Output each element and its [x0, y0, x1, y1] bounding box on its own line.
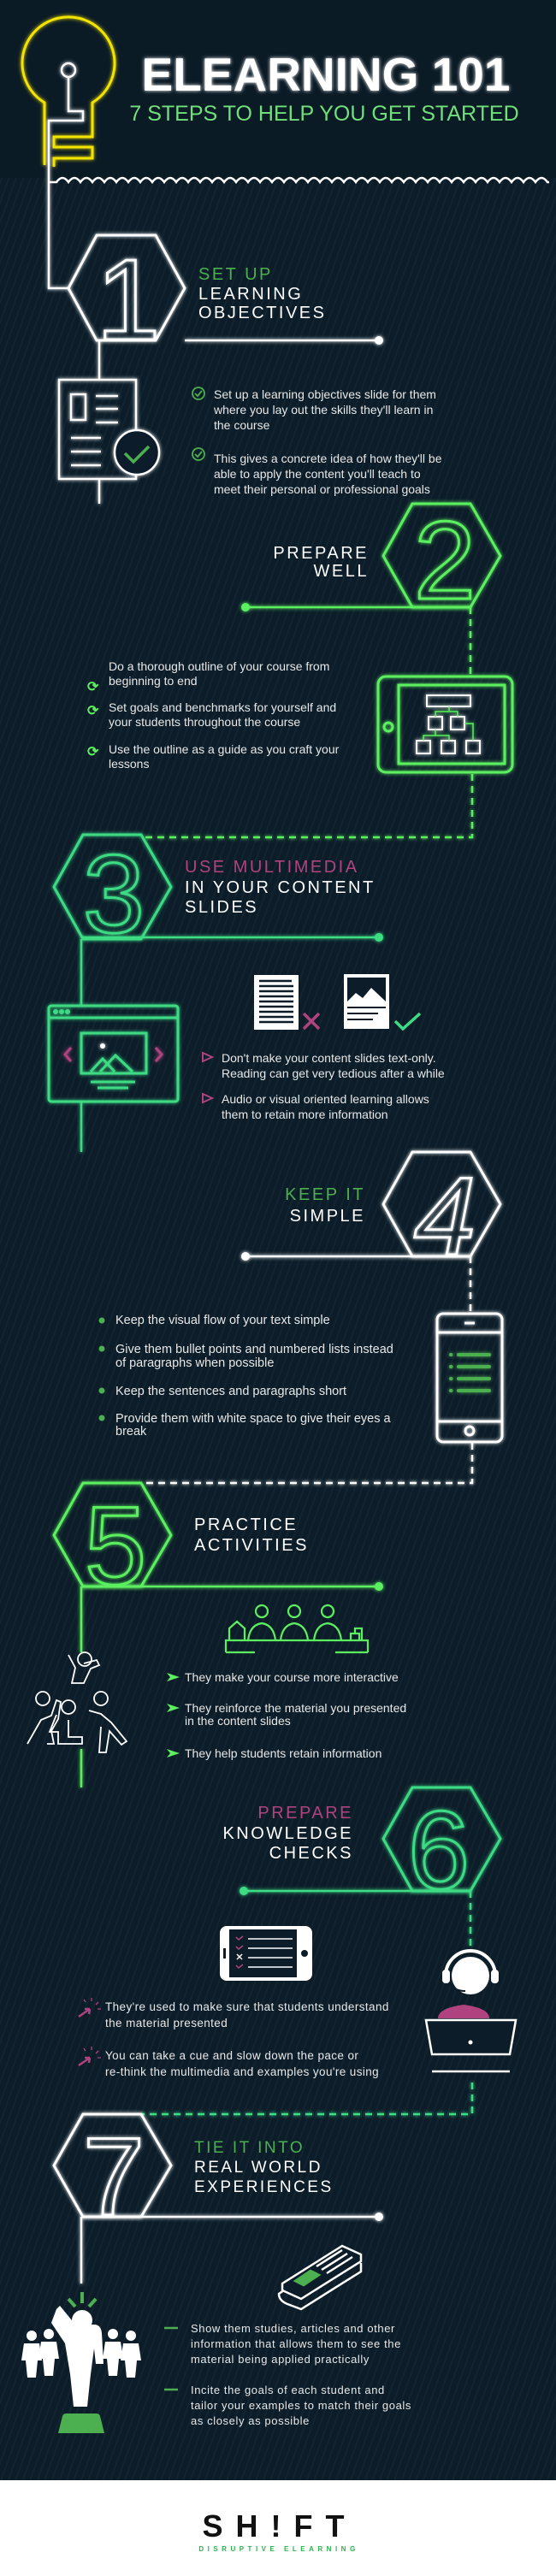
- icon: light bulb: [22, 17, 115, 288]
- step 5 bullets: [167, 1670, 406, 1760]
- step 3 heading: USE MULTIMEDIA: [185, 858, 359, 877]
- step 6 bullets: You can take a cue and slow down the pace or: [105, 2049, 358, 2062]
- icon: group at table: [226, 1605, 368, 1652]
- step 2 bullets: Do a thorough outline of your course from: [109, 659, 329, 673]
- title: ELEARNING 101: [142, 48, 510, 101]
- step 4 bullets: Keep the visual flow of your text simple: [115, 1314, 330, 1327]
- step 1 bullets: [192, 387, 442, 496]
- step 6 bullets: [79, 1998, 389, 2078]
- step 5 hexagon: [54, 1483, 171, 1608]
- step 3 bullets: [203, 1051, 445, 1121]
- step 7 heading: TIE IT INTO: [194, 2139, 305, 2157]
- step 1 heading: LEARNING: [198, 285, 303, 304]
- step 3 hexagon: 3: [83, 831, 145, 956]
- step 6 bullets: the material presented: [105, 2017, 228, 2029]
- step 5 heading: ACTIVITIES: [194, 1536, 309, 1555]
- step 1 hexagon: [68, 235, 185, 364]
- step 1 bullets: the course: [214, 418, 270, 432]
- step 5 heading: PRACTICE: [194, 1515, 298, 1534]
- footer: [0, 2480, 556, 2576]
- step 3 bullets: Don't make your content slides text-only.: [222, 1051, 436, 1065]
- step 6 bullets: re-think the multimedia and examples you're using: [105, 2065, 379, 2078]
- subtitle: 7 STEPS TO HELP YOU GET STARTED: [129, 102, 519, 126]
- icon: people pyramid: [27, 1652, 127, 1752]
- icon: phone with checklist: [220, 1926, 312, 1981]
- step 4 bullets: [99, 1314, 393, 1439]
- step 2 heading: [273, 544, 369, 581]
- step 5 bullets: They make your course more interactive: [185, 1670, 399, 1684]
- step 7 hexagon: 7: [83, 2114, 145, 2239]
- icon: text vs image docs: [254, 974, 420, 1030]
- step 3 hexagon: [54, 831, 171, 956]
- step 6 bullets: They're used to make sure that students understand: [105, 2000, 389, 2013]
- step 1 bullets: This gives a concrete idea of how they'll be: [214, 452, 442, 465]
- step 4 heading: KEEP IT: [285, 1185, 365, 1204]
- icon: support agent with laptop: [426, 1951, 516, 2071]
- step 1 hexagon: 1: [96, 235, 161, 364]
- step 6 hexagon: [383, 1787, 500, 1912]
- step 3 heading: [185, 858, 376, 917]
- step 2 bullets: Set goals and benchmarks for yourself and: [109, 700, 336, 714]
- step 5 bullets: in the content slides: [185, 1714, 291, 1728]
- step 4 hexagon: 4: [414, 1154, 476, 1279]
- step 7 bullets: material being applied practically: [191, 2353, 370, 2366]
- footer: SH!FT: [203, 2508, 357, 2544]
- step 2 bullets: Use the outline as a guide as you craft your: [109, 742, 340, 756]
- step 4 heading: SIMPLE: [290, 1207, 365, 1226]
- step 7 bullets: Show them studies, articles and other: [191, 2322, 395, 2335]
- step 4 heading: [285, 1185, 365, 1226]
- icon: tablet with chart: [378, 676, 512, 772]
- step 3 bullets: Audio or visual oriented learning allows: [222, 1092, 429, 1106]
- step 7 heading: EXPERIENCES: [194, 2178, 334, 2196]
- step 6 heading: PREPARE: [257, 1804, 353, 1823]
- step 2 bullets: [87, 659, 340, 771]
- step 6 hexagon: 6: [408, 1787, 470, 1912]
- step 5 bullets: They help students retain information: [185, 1746, 382, 1760]
- icon: smartphone: [437, 1314, 502, 1442]
- step 2 hexagon: [383, 498, 500, 623]
- step 2 bullets: beginning to end: [109, 674, 198, 688]
- step 7 bullets: tailor your examples to match their goals: [191, 2399, 411, 2412]
- step 1 bullets: meet their personal or professional goals: [214, 482, 430, 496]
- step 2 bullets: ⟳: [87, 704, 99, 718]
- step 2 heading: PREPARE: [273, 544, 369, 563]
- step 6 heading: KNOWLEDGE: [222, 1824, 353, 1843]
- step 2 bullets: your students throughout the course: [109, 715, 300, 729]
- icon: newspaper: [279, 2246, 361, 2309]
- step 3 heading: SLIDES: [185, 898, 258, 917]
- step 2 hexagon: 2: [414, 498, 476, 623]
- step 6 heading: [222, 1804, 353, 1863]
- step 7 bullets: information that allows them to see the: [191, 2337, 401, 2350]
- title: [129, 48, 519, 126]
- step 4 bullets: break: [115, 1425, 147, 1439]
- step 5 hexagon: 5: [85, 1483, 146, 1608]
- step 4 bullets: Give them bullet points and numbered lists instead: [115, 1343, 393, 1356]
- step 1 heading: SET UP: [198, 265, 273, 284]
- step 4 bullets: of paragraphs when possible: [115, 1356, 274, 1370]
- step 3 bullets: them to retain more information: [222, 1108, 388, 1121]
- step 6 heading: CHECKS: [269, 1844, 353, 1863]
- step 4 bullets: Keep the sentences and paragraphs short: [115, 1385, 346, 1398]
- step 3 bullets: Reading can get very tedious after a while: [222, 1066, 445, 1080]
- connectors: [81, 340, 472, 2284]
- step 7 bullets: Incite the goals of each student and: [191, 2384, 385, 2396]
- step 7 bullets: as closely as possible: [191, 2414, 310, 2427]
- step 4 bullets: Provide them with white space to give their eyes a: [115, 1412, 392, 1426]
- step 5 bullets: They reinforce the material you presented: [185, 1701, 406, 1715]
- step 4 hexagon: [383, 1152, 500, 1279]
- step 2 bullets: lessons: [109, 757, 149, 771]
- icon: browser slide: [49, 1006, 178, 1102]
- footer: DISRUPTIVE ELEARNING: [198, 2545, 359, 2553]
- step 7 hexagon: [54, 2114, 171, 2239]
- step 1 bullets: able to apply the content you'll teach to: [214, 467, 421, 481]
- step 1 heading: OBJECTIVES: [198, 304, 326, 322]
- step 7 heading: REAL WORLD: [194, 2159, 322, 2177]
- step 7 bullets: [164, 2322, 411, 2427]
- step 1 bullets: Set up a learning objectives slide for them: [214, 387, 436, 401]
- icon: leader with group: [21, 2292, 141, 2433]
- wavy divider: [49, 178, 549, 182]
- icon: objectives document: [59, 380, 159, 479]
- step 7 heading: [194, 2139, 334, 2196]
- step 1 heading: [198, 265, 326, 322]
- step 2 bullets: ⟳: [87, 680, 99, 694]
- step 2 bullets: ⟳: [87, 745, 99, 759]
- step 3 heading: IN YOUR CONTENT: [185, 878, 376, 897]
- step 1 bullets: where you lay out the skills they'll learn in: [213, 403, 433, 417]
- step 5 heading: [194, 1515, 309, 1555]
- step 2 heading: WELL: [314, 562, 369, 581]
